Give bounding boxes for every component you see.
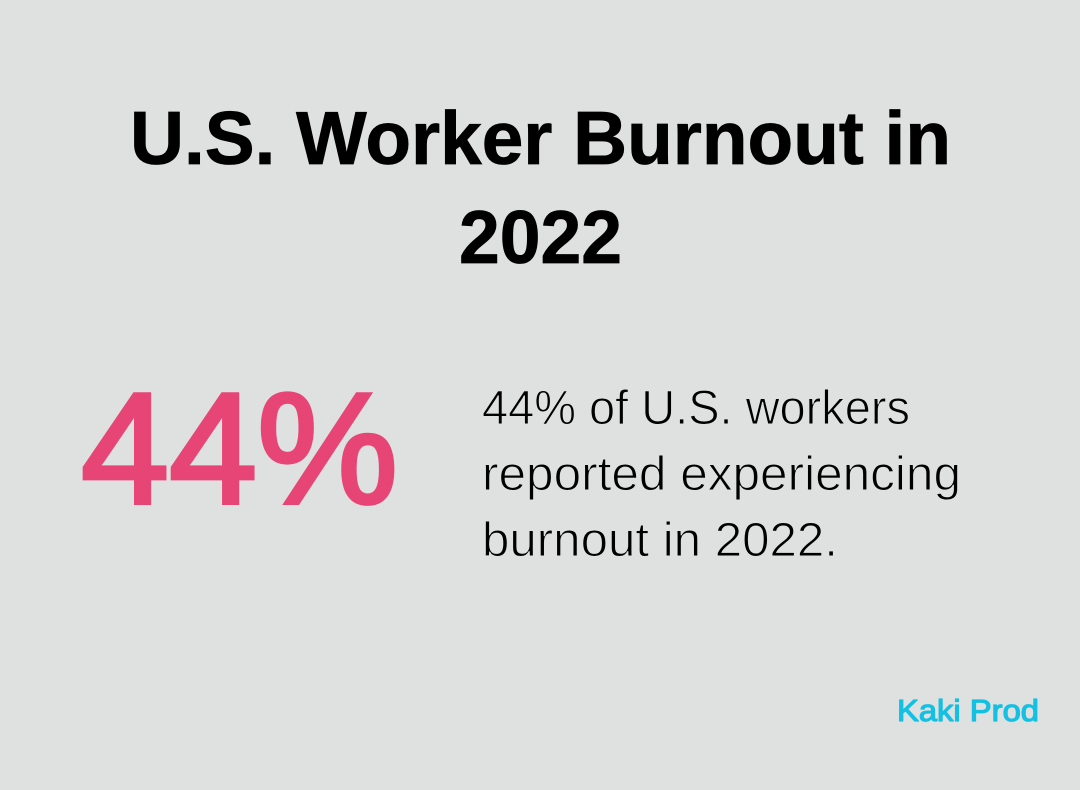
description text: burnout in 2022. — [482, 514, 838, 567]
description text — [482, 382, 961, 567]
title: U.S. Worker Burnout in — [130, 96, 951, 180]
title: 2022 — [459, 195, 622, 279]
big stat: 44%: 44% — [81, 361, 398, 537]
brand logo: Kaki Prod: Kaki Prod — [897, 693, 1039, 728]
description text: reported experiencing — [482, 448, 961, 501]
title — [130, 96, 951, 279]
description text: 44% of U.S. workers — [482, 382, 910, 435]
